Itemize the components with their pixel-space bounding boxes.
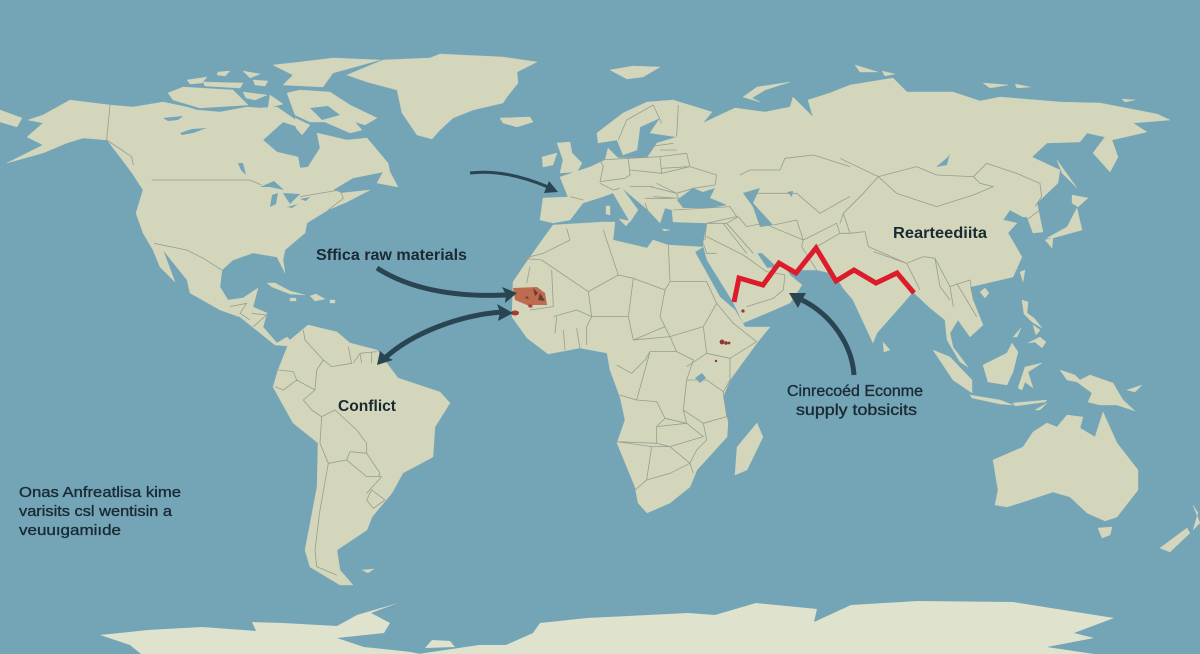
land: Mediterranean islands (606, 206, 670, 231)
land: Hainan (980, 288, 989, 298)
Aral Sea (787, 191, 793, 197)
Black Sea (677, 188, 727, 208)
land: Great Britain (557, 142, 582, 173)
shaded region: West Africa raw materials (511, 287, 745, 362)
land: Iceland (500, 117, 533, 127)
Canadian lakes (163, 116, 246, 175)
label: raw materials: Sffica raw materials (316, 247, 467, 264)
land: Ireland (542, 153, 557, 167)
country borders: Europe and West Asia (570, 105, 850, 270)
arrow: supply shocks to Arabian Sea (789, 293, 854, 375)
land: Aleutian tip (0, 110, 22, 127)
inland water bodies (163, 106, 950, 383)
Lake Baikal (936, 153, 950, 167)
land: Sri Lanka (883, 342, 890, 352)
land: South America (273, 325, 450, 585)
land: Sakhalin (1057, 160, 1077, 188)
land: Philippines (1013, 300, 1046, 348)
land: Africa (512, 222, 770, 513)
text block: bottom-left note: veuuıgamiıde (19, 522, 121, 539)
Foxe Basin (310, 106, 340, 120)
Lake Victoria (695, 373, 706, 383)
callout: Atlantic arrow to Europe (470, 172, 558, 193)
land: Sumatra (933, 350, 972, 393)
land: Greenland (347, 54, 537, 139)
country borders: South America (275, 330, 385, 575)
land: New Britain (1127, 385, 1142, 392)
land: Siberian islands (855, 65, 1135, 102)
land: Novaya Zemlya (743, 82, 790, 102)
Great Lakes (260, 181, 310, 208)
land: Svalbard (610, 66, 660, 79)
text block: bottom-left note: varisits csl wentisin a (19, 503, 173, 520)
Caspian Sea (743, 188, 773, 227)
text block: bottom-left note: Onas Anfreatlisa kime (19, 484, 181, 501)
country borders: East Asia (840, 158, 1042, 317)
land: Java and Lesser Sunda (970, 395, 1047, 410)
land: Sulawesi (1018, 363, 1042, 390)
label: conflict: Conflict (338, 398, 397, 415)
land: Antarctica (100, 601, 1114, 654)
land: Canadian Arctic islands (168, 58, 380, 135)
land: Taiwan (1020, 270, 1025, 282)
land: Caribbean islands (267, 283, 335, 303)
red route line: Red Sea to Bay of Bengal (734, 248, 914, 302)
land: Tasmania (1098, 527, 1112, 538)
land: Borneo (983, 343, 1018, 385)
land: North America (7, 100, 398, 346)
arrow: West Africa to South America, double headed (377, 304, 513, 365)
land: Japan (1045, 195, 1088, 248)
land: New Guinea (1060, 370, 1135, 411)
land: Falkland Islands (362, 569, 374, 573)
country borders: Africa and Arabia (523, 223, 785, 490)
label: supply shocks: Cinrecoéd Econme (787, 383, 923, 400)
land: Madagascar (735, 423, 763, 475)
Baltic Gulf (640, 133, 652, 154)
land: New Zealand (1160, 505, 1200, 552)
land: Australia (993, 412, 1138, 521)
label: supply shocks: supply tobsicits (796, 402, 917, 419)
land: Eurasia (540, 78, 1170, 367)
label: Asia region: Rearteediita (893, 225, 987, 242)
country borders: Americas north (107, 105, 343, 327)
arrow: raw materials to West Africa (377, 268, 517, 303)
